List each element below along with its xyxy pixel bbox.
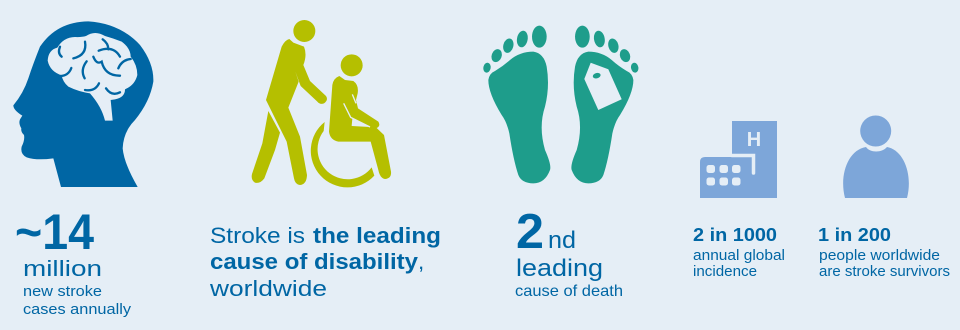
icon: feet with toe tag: [483, 26, 639, 183]
icon: head with brain: [13, 21, 153, 187]
caption: annual global incidence: [693, 247, 785, 280]
panel: new stroke cases: [13, 21, 153, 318]
stat: ~14: ~14: [15, 204, 94, 260]
stat: 2nd: 2: [516, 205, 544, 259]
label: million: million: [23, 256, 102, 281]
icon: hospital: H: [747, 129, 761, 151]
caption: people worldwide are stroke survivors: [819, 247, 950, 280]
stat: 2nd: nd: [548, 227, 576, 254]
text: stroke is the leading cause of disability worldwide: ,: [418, 249, 424, 274]
text: stroke is the leading cause of disability worldwide: cause of disability: [210, 249, 419, 274]
caption: annual global incidence: incidence: [693, 263, 757, 280]
stat: 2 in 1000: 2 in 1000: [693, 225, 777, 245]
icon: person: [843, 116, 909, 198]
caption: people worldwide are stroke survivors: people worldwide: [819, 247, 940, 264]
left foot: [483, 26, 550, 183]
icon: person pushing wheelchair: [252, 20, 391, 187]
icon: hospital: [700, 121, 777, 198]
panel: second leading cause of death: [483, 26, 639, 300]
caption: new stroke cases annually: new stroke: [23, 283, 102, 300]
caption: new stroke cases annually: cases annually: [23, 301, 132, 318]
caption: cause of death: cause of death: [515, 283, 623, 300]
text: stroke is the leading cause of disability worldwide: the leading: [313, 223, 441, 248]
toe tag: [584, 63, 622, 110]
stat: 2nd: [516, 205, 576, 259]
caption: annual global incidence: annual global: [693, 247, 785, 264]
panel: leading cause of disability: [209, 20, 441, 301]
text: stroke is the leading cause of disability worldwide: worldwide: [209, 276, 327, 301]
panel: stroke survivors: [818, 116, 950, 280]
caption: people worldwide are stroke survivors: are stroke survivors: [819, 263, 950, 280]
stat: 1 in 200: 1 in 200: [818, 225, 891, 245]
right foot: [571, 26, 639, 183]
text: stroke is the leading cause of disability worldwide: Stroke is: [210, 223, 305, 248]
text: stroke is the leading cause of disability worldwide: [209, 223, 441, 301]
panel: annual global incidence: [693, 121, 785, 280]
label: leading: leading: [516, 255, 603, 282]
caption: new stroke cases annually: [23, 283, 132, 318]
